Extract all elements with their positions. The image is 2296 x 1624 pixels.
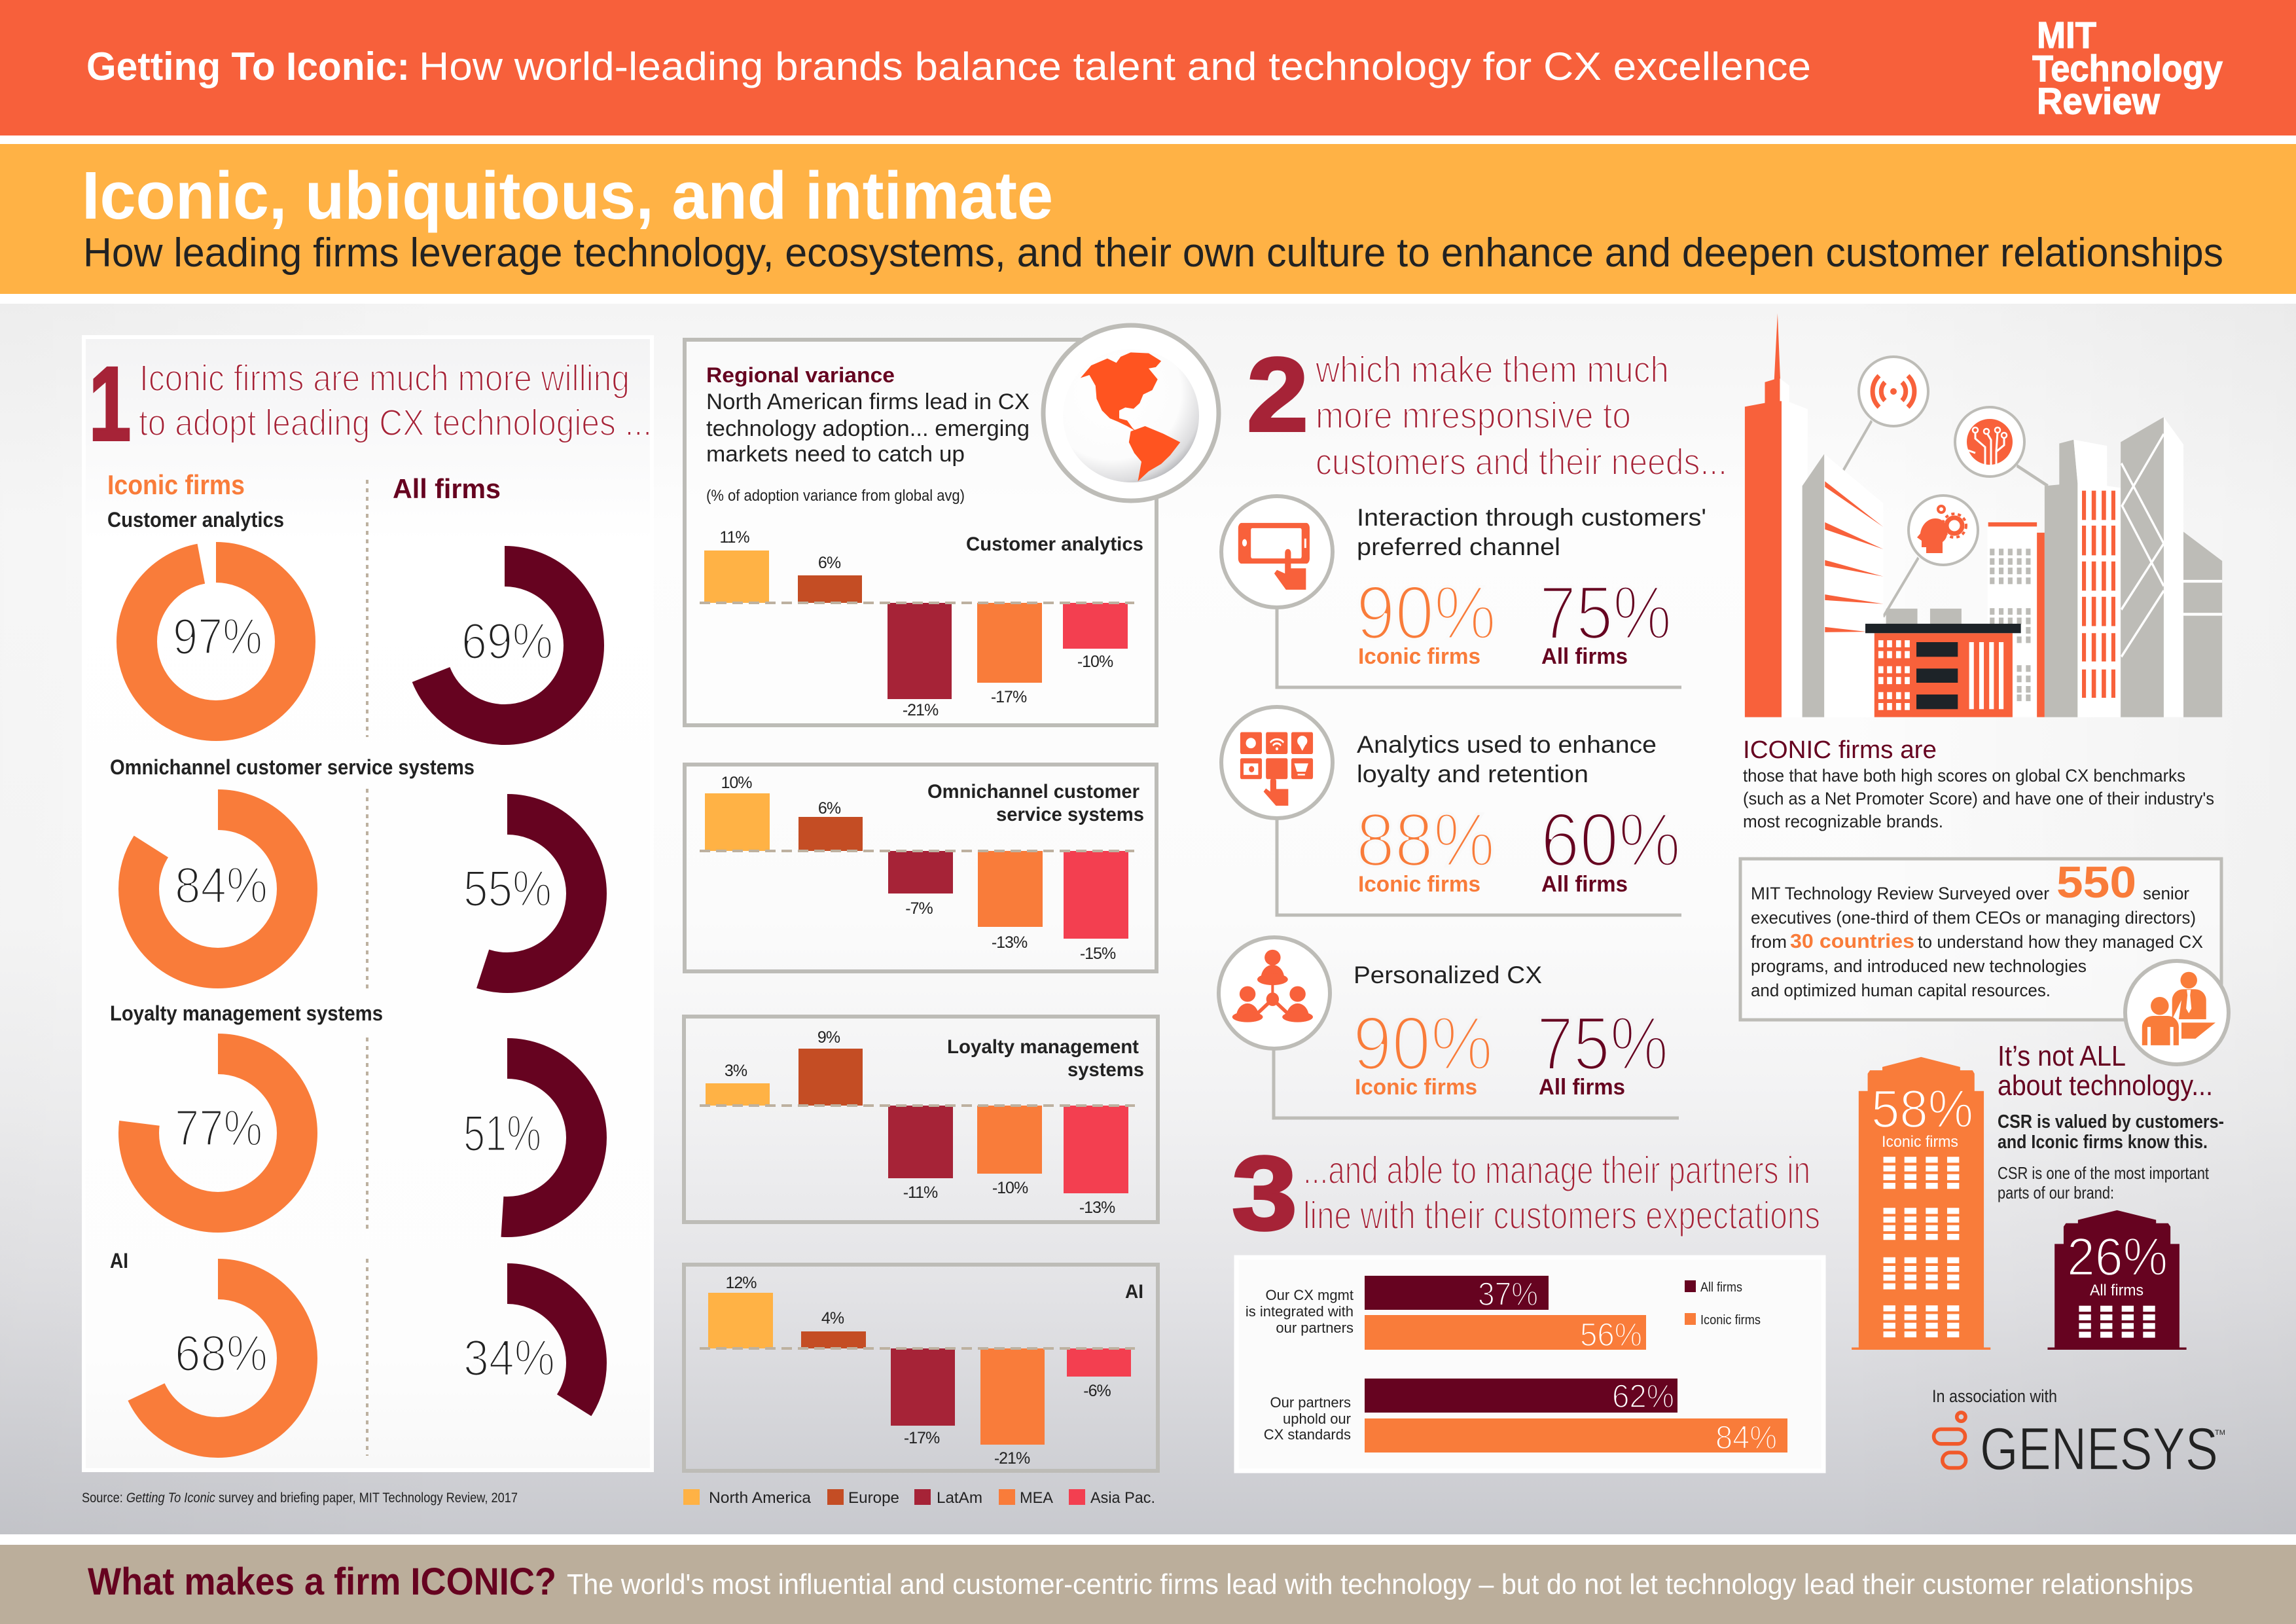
chart title: Omnichannel customer service systems: Omnichannel customer (927, 781, 1139, 803)
label: AI: AI (110, 1249, 128, 1272)
donut: all firms 34% (428, 1284, 586, 1442)
panel: partners bar chart (1236, 1257, 1823, 1471)
bar chart: customer analytics (700, 528, 1134, 719)
bar chart: customer analytics: 6% (818, 554, 841, 572)
value: iconic 88%: 88% (1356, 797, 1495, 882)
row labels: Our partners (1270, 1394, 1351, 1411)
value: iconic 90%: Iconic firms (1358, 644, 1480, 669)
donut: all firms 51% (428, 1058, 586, 1217)
stat heading (1357, 504, 1706, 560)
building: iconic firms 58%: Iconic firms (1882, 1133, 1958, 1151)
stat heading (1357, 731, 1657, 787)
text: CSR statement: CSR is valued by customers- (1998, 1111, 2224, 1132)
regional variance intro text: technology adoption... emerging (706, 416, 1030, 441)
bar chart: customer analytics: -21% (903, 701, 939, 719)
survey text: 30 countries (1790, 929, 1914, 952)
column heading: Iconic firms: Iconic firms (107, 469, 245, 500)
definition: ICONIC firms are: ICONIC firms are (1743, 736, 1937, 764)
stat heading: Analytics used to enhance (1357, 731, 1657, 758)
footer question: What makes a firm ICONIC? (88, 1561, 556, 1603)
survey text: 550 (2056, 857, 2136, 907)
section 2 heading: 2 (1247, 336, 1308, 453)
survey text: and optimized human capital resources. (1751, 981, 2051, 1000)
donut: all firms 55%: 55% (463, 859, 552, 917)
icon: circuit brain (1955, 407, 2024, 477)
regional variance intro text (706, 363, 1030, 505)
donut: iconic 97% (137, 562, 295, 721)
bar: all firms 37% (1365, 1276, 1549, 1312)
row labels: CX standards (1264, 1426, 1351, 1443)
chart title: Loyalty management systems (947, 1036, 1144, 1081)
bar: iconic firms 84%: 84% (1715, 1419, 1777, 1456)
bar chart: omnichannel: -13% (992, 933, 1028, 952)
source note: Source: Getting To Iconic survey and briefing paper, MIT Technology Review, 2017 (82, 1490, 518, 1506)
survey text: senior (2143, 884, 2189, 903)
definition: ICONIC firms are: (such as a Net Promoter Score) and have one of their industry's (1743, 789, 2214, 808)
legend: regions: LatAm (937, 1489, 982, 1507)
chart title: Loyalty management systems: Loyalty management (947, 1036, 1139, 1058)
bar chart: AI (700, 1274, 1135, 1468)
bar chart: omnichannel: -7% (905, 899, 933, 918)
panel: regional variance, omnichannel (685, 765, 1157, 971)
dashed column divider (366, 480, 368, 1456)
text: CSR statement: parts of our brand: (1998, 1183, 2114, 1202)
legend: All firms (1700, 1280, 1742, 1295)
donut: iconic 97%: 97% (173, 607, 262, 665)
label: Omnichannel customer service systems: Omnichannel customer service systems (110, 755, 475, 779)
logo: Genesys (1934, 1413, 2225, 1483)
survey text: programs, and introduced new technologies (1751, 956, 2087, 976)
value: all firms 75%: 75% (1539, 570, 1672, 655)
bar chart: loyalty (700, 1028, 1135, 1217)
logo: Genesys: GENESYS (1980, 1416, 2218, 1483)
survey text (1751, 857, 2203, 1000)
logo: MIT Technology Review: Review (2037, 81, 2161, 122)
regional variance intro text: Regional variance (706, 363, 895, 387)
value: all firms 60%: All firms (1541, 872, 1628, 897)
header title: Getting To Iconic: (86, 45, 410, 88)
donut: iconic 68%: 68% (175, 1324, 268, 1382)
section 3 heading (1232, 1134, 1820, 1252)
survey text: from (1751, 932, 1787, 952)
bar chart: loyalty: -13% (1079, 1199, 1115, 1217)
bar chart: AI: -17% (904, 1429, 940, 1447)
stat heading: preferred channel (1357, 533, 1560, 560)
bar chart: customer analytics: -17% (991, 688, 1027, 706)
logo: MIT Technology Review: Technology (2032, 48, 2223, 90)
legend: regions: MEA (1020, 1489, 1053, 1507)
bar chart: customer analytics: 11% (719, 528, 749, 547)
bar chart: AI: 4% (821, 1309, 844, 1327)
subtitle: How leading firms leverage technology, ecosystems, and their own culture to enhance and deepen customer relationships (83, 230, 2223, 276)
legend: regions: Asia Pac. (1090, 1489, 1155, 1507)
panel: regional variance, AI (684, 1265, 1158, 1471)
section 1 heading (89, 345, 652, 462)
bar: all firms 37%: 37% (1478, 1276, 1538, 1312)
section 1 heading: to adopt leading CX technologies ... (139, 402, 652, 444)
panel: adoption donuts (84, 337, 652, 1470)
panel: regional variance, loyalty (684, 1017, 1158, 1222)
stat heading: Personalized CX (1354, 962, 1542, 988)
definition: ICONIC firms are: most recognizable brands. (1743, 812, 1943, 831)
section 2 heading: which make them much (1315, 349, 1669, 391)
chart title: Loyalty management systems: systems (1067, 1059, 1144, 1081)
donut: all firms 34%: 34% (463, 1329, 555, 1386)
donut: all firms 69%: 69% (461, 612, 553, 670)
building: all firms 26% (2047, 1210, 2187, 1350)
regional variance intro text: (% of adoption variance from global avg) (706, 487, 965, 505)
bar chart: customer analytics: -10% (1077, 653, 1113, 671)
chart title: AI: AI (1125, 1281, 1143, 1303)
bar chart: AI: -6% (1083, 1382, 1111, 1400)
section 2 heading: more mresponsive to (1316, 395, 1631, 437)
bar chart: AI: 12% (725, 1274, 757, 1292)
section 1 heading: 1 (89, 345, 131, 462)
row labels: Our CX mgmt (1266, 1287, 1354, 1303)
icon: wireless signal (1859, 357, 1928, 426)
bar chart: loyalty: -10% (992, 1179, 1028, 1197)
row labels: our partners (1276, 1320, 1354, 1336)
bar chart: omnichannel: -15% (1080, 945, 1116, 963)
section 2 heading (1247, 336, 1727, 483)
building: all firms 26%: All firms (2090, 1282, 2144, 1299)
logo: MIT Technology Review (2032, 14, 2223, 122)
donut: iconic 77%: 77% (175, 1099, 262, 1157)
bar: iconic firms 56%: 56% (1580, 1316, 1642, 1353)
heading: It's not ALL about technology: It’s not ALL (1998, 1040, 2126, 1072)
building: all firms 26%: 26% (2067, 1227, 2168, 1287)
donut: all firms 51%: 51% (463, 1104, 541, 1162)
value: iconic 90%: 90% (1353, 1001, 1493, 1086)
legend (1685, 1280, 1761, 1327)
legend: Iconic firms (1700, 1313, 1761, 1327)
stat heading: loyalty and retention (1357, 761, 1588, 787)
stat: preferred channel (1221, 496, 1706, 687)
icon: head with gears (1909, 496, 1978, 565)
chart title: Customer analytics: Customer analytics (966, 533, 1143, 555)
heading: It's not ALL about technology: about technology... (1998, 1070, 2213, 1102)
survey text: MIT Technology Review Surveyed over (1751, 884, 2049, 903)
stat heading: Interaction through customers' (1357, 504, 1706, 531)
building: iconic firms 58% (1852, 1057, 1990, 1350)
building: iconic firms 58%: 58% (1871, 1079, 1973, 1139)
bar: iconic firms 84% (1365, 1418, 1787, 1456)
value: all firms 60%: 60% (1541, 797, 1681, 882)
logo: MIT Technology Review: MIT (2037, 14, 2096, 56)
bar chart: loyalty: 9% (817, 1028, 840, 1047)
footer statement: The world's most influential and customer-centric firms lead with technology – but do not let technology lead their customer relationships (567, 1568, 2193, 1600)
chart title: Omnichannel customer service systems (927, 781, 1144, 825)
main title: Iconic, ubiquitous, and intimate (82, 158, 1053, 233)
section 3 heading: ...and able to manage their partners in (1303, 1149, 1810, 1192)
value: all firms 75%: 75% (1537, 1001, 1668, 1086)
value: all firms 75%: All firms (1541, 644, 1628, 669)
bar: iconic firms 56% (1365, 1315, 1646, 1353)
title band (0, 144, 2296, 294)
value: iconic 88%: Iconic firms (1358, 872, 1480, 897)
sponsor credit: In association with (1932, 1386, 2057, 1406)
bar chart: omnichannel: 6% (818, 799, 841, 818)
donut: all firms 69% (425, 566, 584, 725)
icon: connected people (1219, 937, 1330, 1049)
chart title: Omnichannel customer service systems: service systems (996, 804, 1144, 825)
survey text: executives (one-third of them CEOs or managing directors) (1751, 908, 2196, 928)
heading: It's not ALL about technology (1998, 1040, 2213, 1102)
row labels: is integrated with (1246, 1303, 1354, 1320)
section 2 heading: customers and their needs... (1316, 441, 1727, 483)
label: Customer analytics: Customer analytics (107, 508, 284, 532)
icon: globe (1043, 325, 1219, 501)
legend: regions: North America (709, 1489, 812, 1507)
footer band (0, 1545, 2296, 1624)
text: CSR statement: CSR is one of the most important (1998, 1163, 2210, 1183)
panel: regional variance, customer analytics (685, 325, 1219, 725)
bar: all firms 62% (1365, 1378, 1677, 1415)
regional variance intro text: North American firms lead in CX (706, 389, 1030, 414)
survey text: to understand how they managed CX (1918, 932, 2203, 952)
text: CSR statement (1998, 1111, 2224, 1202)
donut: all firms 55% (428, 814, 586, 973)
header band (0, 0, 2296, 135)
donut: iconic 68% (139, 1279, 297, 1437)
value: all firms 75%: All firms (1539, 1075, 1625, 1100)
donut: iconic 84% (139, 810, 297, 968)
label: Loyalty management systems: Loyalty management systems (110, 1001, 383, 1025)
illustration: city skyline (1745, 314, 2222, 717)
value: iconic 90%: Iconic firms (1355, 1075, 1477, 1100)
donut: iconic 84%: 84% (175, 856, 268, 914)
stat: personalized CX (1219, 937, 1679, 1118)
donut: iconic 77% (139, 1054, 297, 1212)
bar chart: loyalty: -11% (903, 1183, 938, 1202)
text: CSR statement: and Iconic firms know this. (1998, 1132, 2208, 1153)
definition: ICONIC firms are: those that have both high scores on global CX benchmarks (1743, 766, 2185, 785)
row labels: uphold our (1283, 1411, 1351, 1427)
column heading: All firms: All firms (393, 473, 501, 504)
value: iconic 90%: 90% (1356, 570, 1496, 655)
section 1 heading: Iconic firms are much more willing (139, 357, 630, 399)
icon: tablet with hand (1221, 496, 1333, 607)
definition: ICONIC firms are (1743, 736, 2214, 831)
bar chart: omnichannel: 10% (721, 774, 752, 792)
regional variance intro text: markets need to catch up (706, 442, 965, 467)
icon: app tiles with hand (1221, 707, 1333, 818)
row labels (1246, 1287, 1354, 1443)
bar chart: omnichannel (700, 774, 1134, 963)
legend: regions: Europe (848, 1489, 899, 1507)
icon: two business people (2125, 961, 2229, 1064)
section 3 heading: 3 (1232, 1134, 1297, 1252)
callout: survey box (1740, 857, 2229, 1064)
bar chart: loyalty: 3% (725, 1062, 747, 1080)
header title: How world-leading brands balance talent and technology for CX excellence (419, 45, 1811, 88)
legend: regions (683, 1489, 1155, 1507)
bar chart: AI: -21% (994, 1449, 1030, 1468)
section 3 heading: line with their customers expectations (1303, 1194, 1820, 1237)
logo: Genesys: TM (2215, 1429, 2225, 1437)
stat: analytics for loyalty (1221, 707, 1681, 915)
bar: all firms 62%: 62% (1612, 1378, 1674, 1415)
